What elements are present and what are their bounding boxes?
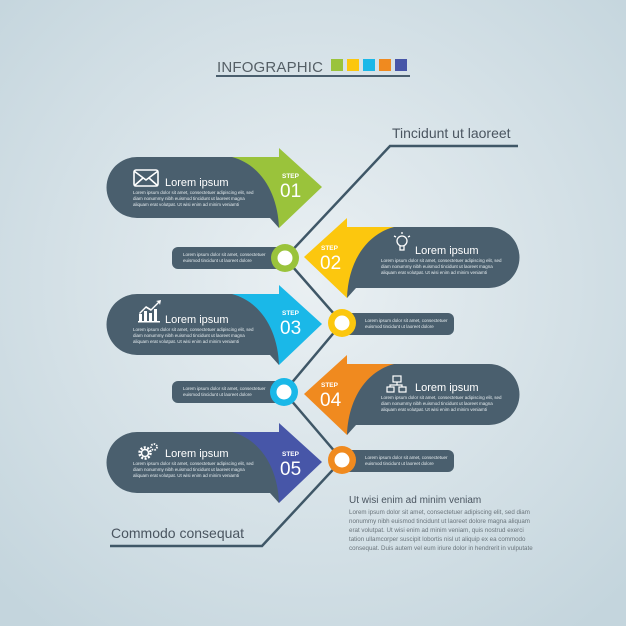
step 5: diam nonummy nibh euismod tincidunt ut laoreet magna [133, 467, 245, 472]
small pill 4: Lorem ipsum dolor sit amet, consectetuer [365, 455, 448, 460]
step 2: 02 [320, 253, 341, 274]
step 4: Lorem ipsum [415, 382, 479, 394]
step 4: 04 [320, 390, 342, 411]
small pill 2: Lorem ipsum dolor sit amet, consectetuer [365, 318, 448, 323]
small pill 4 [328, 446, 454, 474]
text block: description: tation ullamcorper suscipit lobortis nisl ut aliquip ex ea commodo [349, 536, 526, 543]
step 1 [107, 148, 322, 228]
label: bottom: Commodo consequat [111, 525, 244, 541]
step 4: STEP [321, 382, 339, 389]
step 4: diam nonummy nibh euismod tincidunt ut laoreet magna [381, 401, 493, 406]
small pill 4: euismod tincidunt ut laoreet dolore [365, 461, 434, 466]
step 3: aliquam erat volutpat. Ut wisi enim ad minim veniamti [133, 339, 239, 344]
step 3: Lorem ipsum [165, 314, 229, 326]
step 3: diam nonummy nibh euismod tincidunt ut laoreet magna [133, 333, 245, 338]
step 2: Lorem ipsum [415, 245, 479, 257]
step 2: STEP [321, 245, 339, 252]
step 1: diam nonummy nibh euismod tincidunt ut laoreet magna [133, 196, 245, 201]
small pill 2: euismod tincidunt ut laoreet dolore [365, 324, 434, 329]
step 4 [304, 355, 519, 435]
step 5: aliquam erat volutpat. Ut wisi enim ad minim veniamti [133, 473, 239, 478]
step 2 [304, 218, 519, 298]
icon: lightbulb [394, 232, 410, 250]
small pill 2 [328, 309, 454, 337]
small pill 1: Lorem ipsum dolor sit amet, consectetuer [183, 252, 266, 257]
step 4: Lorem ipsum dolor sit amet, consectetuer adipiscing elit, sed [381, 395, 502, 400]
step 1: Lorem ipsum dolor sit amet, consectetuer adipiscing elit, sed [133, 190, 254, 195]
text block: description: consequat. Duis autem vel eum iriure dolor in hendrerit in vulputate [349, 545, 533, 552]
step 5: STEP [282, 451, 300, 458]
text block: description [349, 495, 533, 552]
icon: chart [138, 300, 161, 322]
step 3: 03 [280, 318, 301, 339]
label: top: Tincidunt ut laoreet [392, 125, 511, 141]
title: INFOGRAPHIC [217, 59, 323, 76]
step 5 [107, 423, 322, 503]
icon: network [387, 376, 406, 392]
step 2: aliquam erat volutpat. Ut wisi enim ad minim veniamti [381, 270, 487, 275]
step 2: Lorem ipsum dolor sit amet, consectetuer adipiscing elit, sed [381, 258, 502, 263]
step 3: Lorem ipsum dolor sit amet, consectetuer adipiscing elit, sed [133, 327, 254, 332]
small pill 3: Lorem ipsum dolor sit amet, consectetuer [183, 386, 266, 391]
text block: description: nonummy nibh euismod tincidunt ut laoreet dolore magna aliquam [349, 518, 530, 525]
step 1: STEP [282, 173, 300, 180]
step 5: Lorem ipsum dolor sit amet, consectetuer adipiscing elit, sed [133, 461, 254, 466]
step 4: aliquam erat volutpat. Ut wisi enim ad minim veniamti [381, 407, 487, 412]
text block: description: erat volutpat. Ut wisi enim ad minim veniam, quis nostrud exerci [349, 527, 524, 534]
small pill 1: euismod tincidunt ut laoreet dolore [183, 258, 252, 263]
small pill 3: euismod tincidunt ut laoreet dolore [183, 392, 252, 397]
icon: gears [140, 444, 157, 458]
connector line [110, 146, 518, 546]
text block: description: Ut wisi enim ad minim veniam [349, 495, 481, 506]
step 2: diam nonummy nibh euismod tincidunt ut laoreet magna [381, 264, 493, 269]
step 1: Lorem ipsum [165, 177, 229, 189]
small pill 3 [172, 378, 298, 406]
step 1: 01 [280, 181, 301, 202]
step 3: STEP [282, 310, 300, 317]
title [216, 59, 410, 77]
step 3 [107, 285, 322, 365]
step 1: aliquam erat volutpat. Ut wisi enim ad minim veniamti [133, 202, 239, 207]
step 5: Lorem ipsum [165, 448, 229, 460]
text block: description: Lorem ipsum dolor sit amet, consectetuer adipiscing elit, sed diam [349, 509, 530, 516]
small pill 1 [172, 244, 299, 272]
step 5: 05 [280, 459, 301, 480]
icon: envelope [134, 170, 158, 186]
